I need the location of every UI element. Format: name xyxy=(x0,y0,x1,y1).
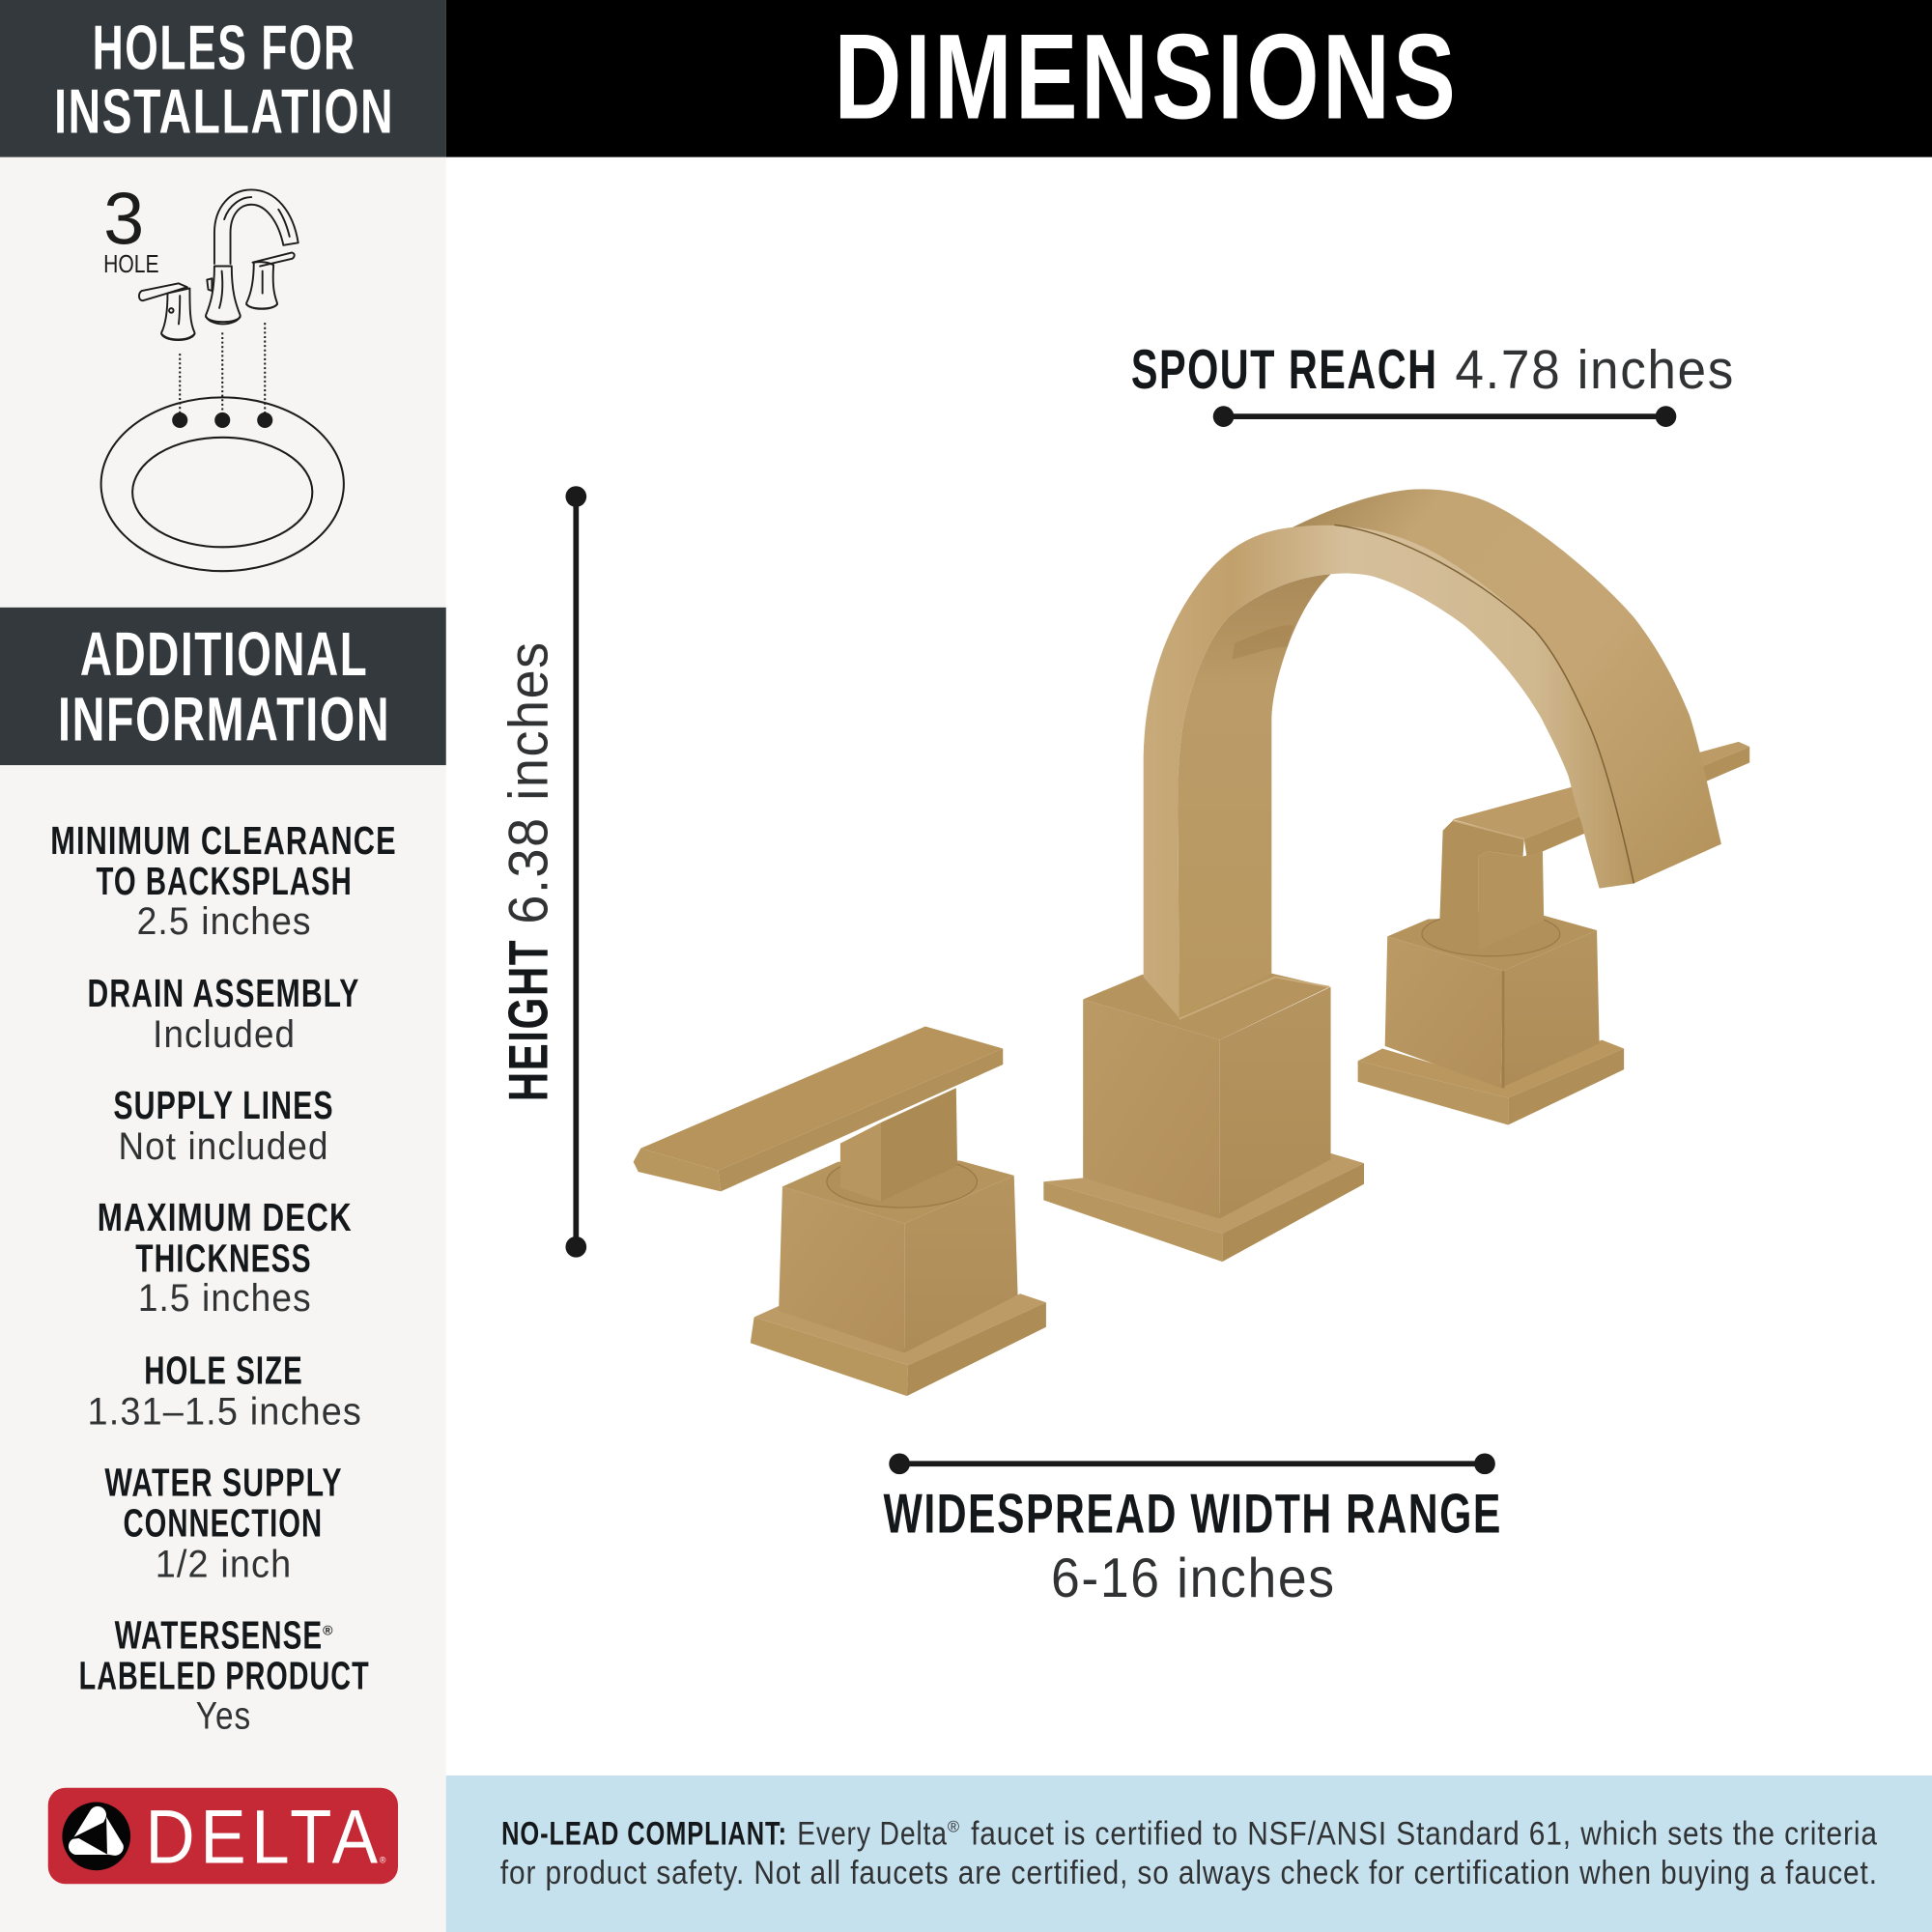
text: water supply connection: CONNECTION xyxy=(124,1501,323,1546)
text: maximum deck thickness: THICKNESS xyxy=(135,1236,312,1280)
text: watersense labeled product: ® xyxy=(323,1623,333,1638)
text: drain assembly xyxy=(88,971,359,1056)
heading: additional information xyxy=(0,608,446,765)
panel: no-lead compliant note: NO-LEAD COMPLIANT: xyxy=(501,1815,787,1852)
text: supply lines xyxy=(113,1083,334,1168)
icon: 3 hole faucet and sink diagram xyxy=(101,179,344,571)
logo: delta xyxy=(48,1788,398,1884)
faucet: right handle xyxy=(1358,742,1749,1125)
panel: no-lead compliant note xyxy=(446,1776,1932,1932)
logo: delta: DELTA xyxy=(146,1794,384,1880)
faucet: left handle xyxy=(634,1026,1046,1396)
text: water supply connection: WATER SUPPLY xyxy=(104,1460,343,1504)
text: watersense labeled product: Yes xyxy=(196,1695,251,1738)
heading: holes for installation: INSTALLATION xyxy=(54,76,394,147)
title: dimensions: DIMENSIONS xyxy=(835,10,1459,144)
dimension: widespread width range: WIDESPREAD WIDTH RANGE xyxy=(884,1484,1502,1546)
image: champagne bronze faucet xyxy=(634,489,1749,1396)
text: minimum clearance to backsplash: 2.5 inches xyxy=(137,900,312,943)
dimension: height: 6.38 inches xyxy=(497,640,559,924)
text: watersense labeled product: WATERSENSE xyxy=(115,1613,323,1658)
text: water supply connection xyxy=(104,1460,343,1586)
dimension: height: HEIGHT xyxy=(497,939,559,1101)
text: water supply connection: 1/2 inch xyxy=(156,1544,292,1586)
faucet: spout xyxy=(1144,489,1721,1018)
panel: left sidebar background xyxy=(0,0,446,1932)
text: 3 hole label: HOLE xyxy=(103,251,159,278)
text: supply lines: SUPPLY LINES xyxy=(113,1083,334,1127)
text: drain assembly: DRAIN ASSEMBLY xyxy=(88,971,359,1015)
text: hole size xyxy=(88,1348,362,1433)
heading: additional information: ADDITIONAL xyxy=(80,619,368,689)
dimension: spout reach xyxy=(1131,339,1735,427)
icon: dotted guide lines xyxy=(180,323,265,420)
text: watersense labeled product xyxy=(79,1613,370,1738)
text: 3 hole label xyxy=(103,179,159,278)
panel: no-lead compliant note: Every Delta xyxy=(797,1815,948,1852)
text: maximum deck thickness xyxy=(98,1195,353,1320)
text: hole size: 1.31–1.5 inches xyxy=(88,1390,362,1433)
text: hole size: HOLE SIZE xyxy=(144,1348,303,1392)
heading: additional information: INFORMATION xyxy=(58,685,390,754)
icon: delta emblem xyxy=(62,1803,130,1870)
heading: holes for installation xyxy=(0,0,446,157)
faucet: center body and base xyxy=(1043,974,1364,1262)
icon: left handle line art xyxy=(139,283,195,340)
dimension: spout reach: 4.78 inches xyxy=(1455,339,1735,400)
panel: no-lead compliant note: ® xyxy=(948,1818,960,1836)
logo: delta: ® xyxy=(380,1856,386,1865)
dimension: spout reach: SPOUT REACH xyxy=(1131,339,1438,401)
dimension: widespread width range xyxy=(884,1453,1502,1609)
icon: sink basin xyxy=(101,397,344,571)
icon: right handle line art xyxy=(246,252,295,309)
text: minimum clearance to backsplash xyxy=(50,818,397,943)
text: supply lines: Not included xyxy=(118,1125,329,1168)
text: minimum clearance to backsplash: MINIMUM CLEARANCE xyxy=(50,818,397,863)
text: 3 hole label: 3 xyxy=(103,179,144,261)
dimension: widespread width range: 6-16 inches xyxy=(1051,1548,1336,1609)
text: drain assembly: Included xyxy=(153,1013,296,1056)
text: maximum deck thickness: 1.5 inches xyxy=(138,1277,312,1320)
dimension: height xyxy=(497,486,586,1258)
icon: spout line art xyxy=(206,189,298,324)
text: minimum clearance to backsplash: TO BACKSPLASH xyxy=(96,859,353,903)
title: dimensions xyxy=(446,0,1932,157)
text: watersense labeled product: LABELED PRODUCT xyxy=(79,1654,370,1698)
text: maximum deck thickness: MAXIMUM DECK xyxy=(98,1195,353,1239)
heading: holes for installation: HOLES FOR xyxy=(93,12,356,82)
